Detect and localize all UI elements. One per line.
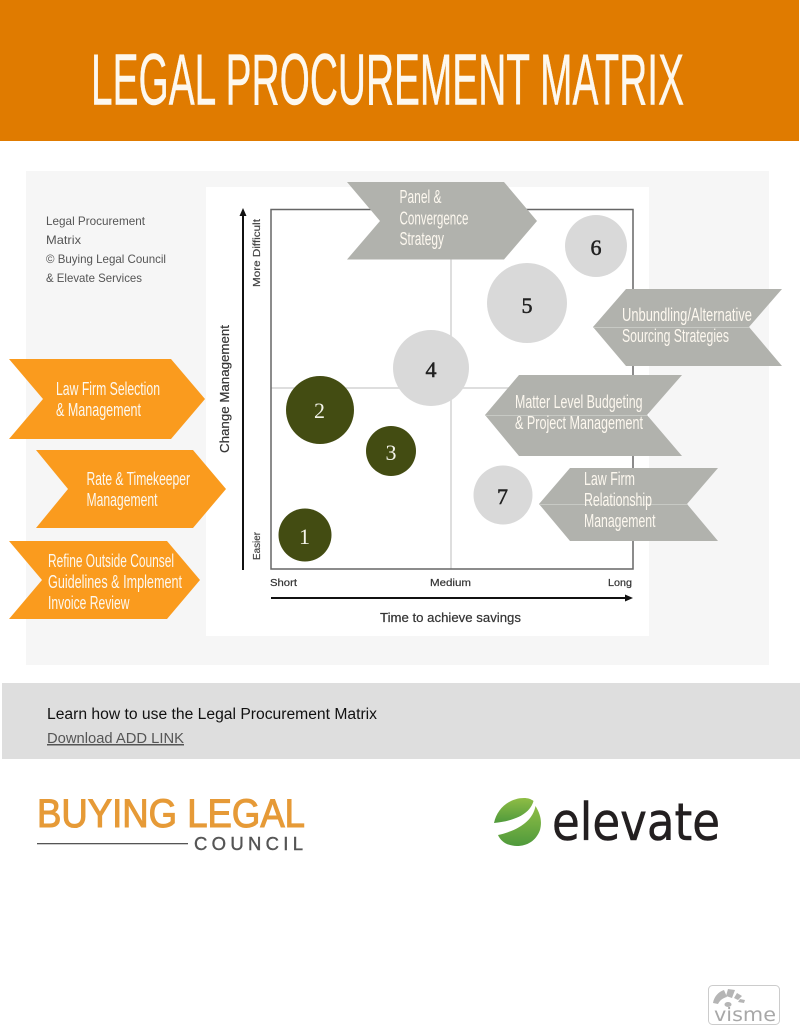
y axis arrow: [240, 208, 246, 570]
copyright note: [46, 214, 166, 285]
arrow: panel and convergence: Strategy: [400, 229, 444, 249]
arrow: panel and convergence: Convergence: [400, 208, 468, 228]
bubble 6: [565, 215, 627, 277]
bubble 3: [366, 426, 416, 476]
copyright note: Legal Procurement: [46, 214, 146, 228]
logo: Buying Legal Council: BUYING LEGAL: [37, 792, 305, 836]
arrow: matter level budgeting: [485, 375, 682, 456]
bubble 5: [487, 263, 567, 343]
y axis low label: Easier: [251, 532, 263, 560]
panel: matrix background: [26, 171, 769, 665]
bubble 6: 6: [590, 235, 602, 260]
bubble 2: 2: [314, 398, 325, 423]
x axis arrow: [271, 594, 633, 602]
arrow: matter level budgeting: Matter Level Budgeting: [515, 392, 642, 412]
arrow: outside counsel guidelines: Invoice Review: [48, 593, 130, 613]
plot frame: [271, 210, 633, 569]
bubble 3: 3: [386, 440, 396, 465]
arrow: law firm selection: [9, 359, 205, 439]
logo: Elevate: [494, 793, 720, 853]
x axis long label: Long: [608, 577, 632, 589]
arrow: law firm selection: Law Firm Selection: [56, 379, 160, 399]
icon: visme wedges: [713, 989, 745, 1007]
header banner: [0, 0, 799, 141]
arrow: rate and timekeeper: [36, 450, 226, 528]
arrow: outside counsel guidelines: [9, 541, 200, 619]
x axis short label: Short: [270, 577, 297, 589]
arrow: rate and timekeeper: Rate & Timekeeper: [86, 469, 190, 489]
copyright note: & Elevate Services: [46, 271, 142, 285]
arrow: law firm selection: & Management: [56, 400, 141, 420]
bubble 4: [393, 330, 469, 406]
grid quadrant lines: [271, 210, 633, 569]
arrow: outside counsel guidelines: Refine Outside Counsel: [48, 551, 174, 571]
bubble 2: [286, 376, 354, 444]
arrow: law firm relationship: [539, 468, 718, 541]
arrow: law firm relationship: Management: [584, 511, 656, 531]
panel: matrix chart: [206, 187, 649, 636]
arrow: unbundling: [593, 289, 782, 366]
arrow: outside counsel guidelines: Guidelines & Implement: [48, 572, 182, 592]
bubble 1: 1: [299, 524, 310, 549]
y axis high label: More Difficult: [251, 219, 263, 287]
copyright note: © Buying Legal Council: [46, 252, 166, 266]
icon: elevate swoosh: [494, 798, 541, 846]
download link: Download ADD LINK: [47, 730, 184, 747]
copyright note: Matrix: [46, 233, 81, 247]
bubble 1: [278, 508, 332, 562]
logo: Buying Legal Council: [37, 792, 305, 854]
logo: Elevate: elevate: [552, 793, 720, 853]
badge: visme: visme: [714, 1004, 776, 1026]
arrow: law firm relationship: Relationship: [584, 490, 652, 510]
badge: visme: [708, 986, 780, 1026]
arrow: matter level budgeting: & Project Management: [515, 413, 643, 433]
bubble 7: 7: [497, 484, 508, 509]
arrow: panel and convergence: [347, 182, 537, 260]
bubble 4: 4: [426, 357, 436, 382]
logo: Buying Legal Council: COUNCIL: [194, 833, 303, 854]
arrow: unbundling: Sourcing Strategies: [622, 326, 729, 346]
arrow: unbundling: Unbundling/Alternative: [622, 305, 752, 325]
arrow: rate and timekeeper: Management: [86, 490, 158, 510]
arrow: panel and convergence: Panel &: [400, 187, 442, 207]
bubble 5: 5: [522, 293, 532, 318]
y axis title: Change Management: [217, 325, 232, 453]
call to action heading: Learn how to use the Legal Procurement Matrix: [47, 706, 377, 723]
bubble 7: [474, 466, 532, 524]
x axis medium label: Medium: [430, 577, 471, 589]
arrow: law firm relationship: Law Firm: [584, 469, 635, 489]
x axis title: Time to achieve savings: [380, 610, 521, 625]
call to action bar: [2, 683, 800, 759]
